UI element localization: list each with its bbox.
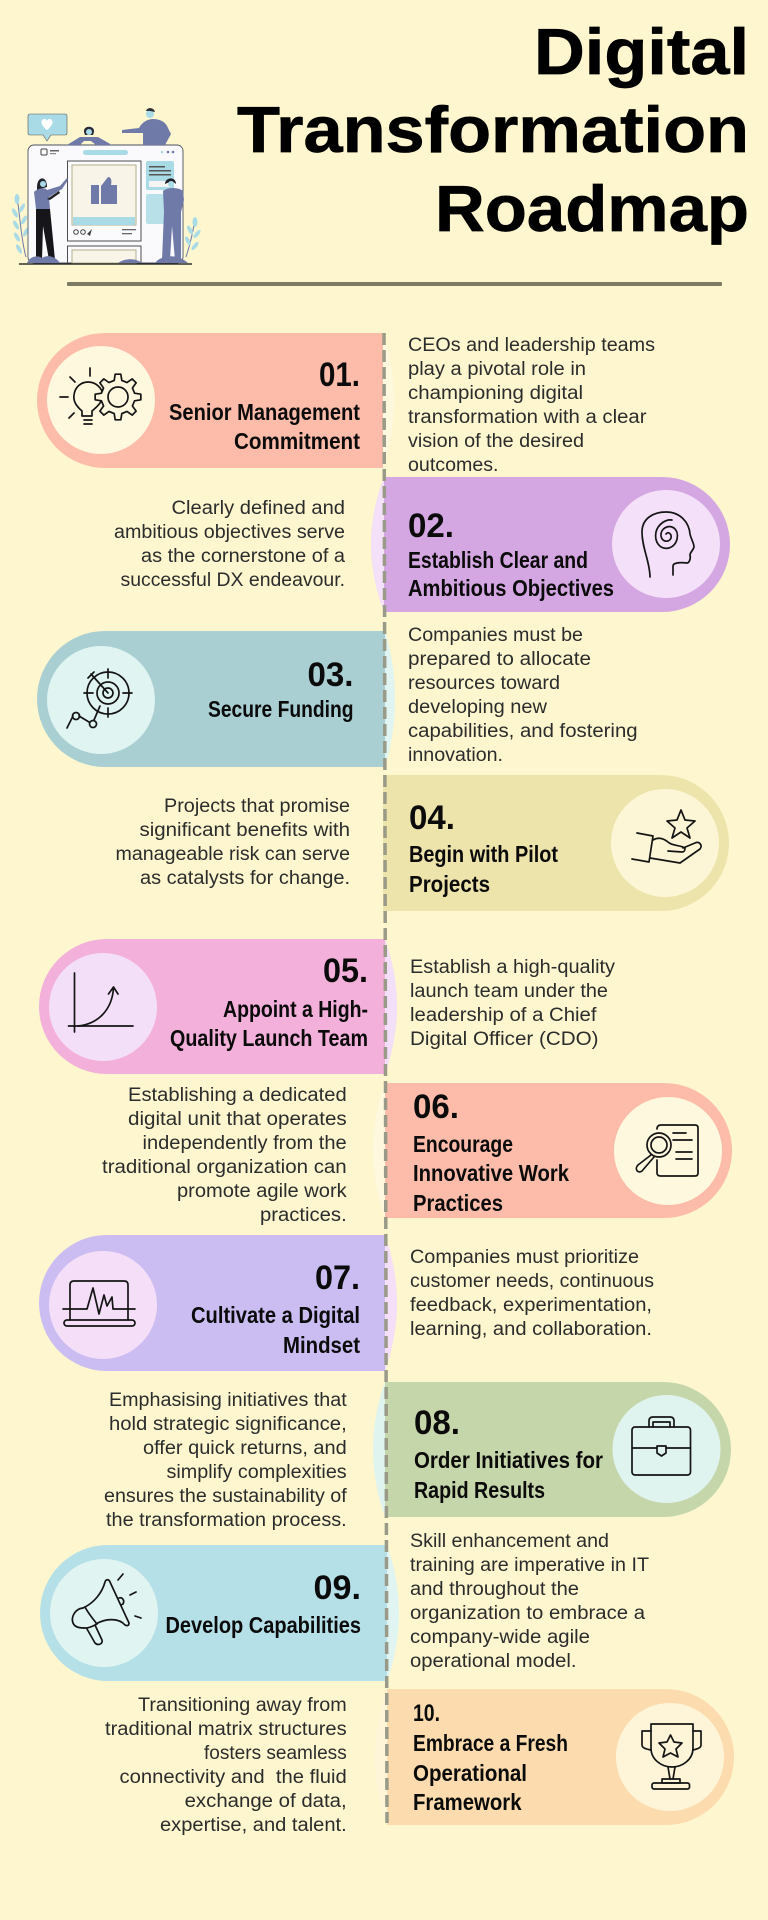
- icon: laptop with pulse: [63, 1281, 135, 1326]
- text block: step 09 description: [410, 1531, 649, 1672]
- panel: step 09: [40, 1545, 399, 1681]
- panel: step 08: [373, 1382, 731, 1517]
- heading: step 07: Cultivate a Digital: [191, 1302, 360, 1328]
- text block: step 01 description: transformation with a clear: [408, 407, 647, 428]
- text block: step 01 description: CEOs and leadership teams: [408, 335, 655, 356]
- text block: step 05 description: leadership of a Chief: [410, 1005, 597, 1026]
- heading: step 07: [191, 1302, 360, 1358]
- step number 03: 03.: [308, 656, 354, 694]
- heading: step 05: [170, 996, 368, 1051]
- text block: step 05 description: Establish a high-quality: [410, 957, 616, 978]
- text block: step 02 description: Clearly defined and: [172, 498, 345, 519]
- dashed center timeline: [384, 333, 387, 1823]
- step number 05: 05.: [323, 952, 368, 990]
- icon: trophy: [642, 1724, 701, 1789]
- text block: step 10 description: connectivity and the fluid: [120, 1767, 347, 1788]
- text block: step 05 description: [410, 957, 616, 1050]
- icon: light bulb and gear: [60, 368, 141, 424]
- text block: step 09 description: and throughout the: [410, 1579, 579, 1600]
- panel: step 04: [383, 775, 729, 911]
- step number 06: 06.: [413, 1088, 459, 1126]
- text block: step 09 description: company-wide agile: [410, 1627, 590, 1648]
- text block: step 05 description: Digital Officer (CDO): [410, 1029, 598, 1050]
- text block: step 07 description: learning, and collaboration.: [410, 1319, 652, 1340]
- text block: step 01 description: championing digital: [408, 383, 583, 404]
- icon: document with magnifier: [636, 1125, 698, 1176]
- illustration: team around social media screen: [11, 108, 202, 265]
- text block: step 05 description: launch team under the: [410, 981, 608, 1002]
- panel: step 06: [373, 1083, 732, 1218]
- text block: step 10 description: Transitioning away from: [138, 1695, 347, 1716]
- heading: step 10: Operational: [413, 1760, 527, 1786]
- title: [237, 15, 749, 245]
- text block: step 04 description: as catalysts for change.: [140, 868, 350, 889]
- panel: step 07: [39, 1235, 397, 1371]
- heading: step 01: [169, 399, 360, 454]
- title: Transformation: [237, 93, 749, 166]
- heading: step 01: Commitment: [234, 428, 360, 454]
- title: Digital: [534, 15, 749, 88]
- text block: step 06 description: Establishing a dedicated: [128, 1085, 347, 1106]
- text block: step 01 description: [408, 335, 655, 476]
- heading: step 10: Framework: [413, 1789, 522, 1815]
- panel: step 10: [375, 1689, 734, 1825]
- heading: step 02: Establish Clear and: [408, 547, 588, 573]
- text block: step 04 description: [116, 796, 350, 889]
- heading: step 06: Encourage: [413, 1131, 513, 1157]
- step number 08: 08.: [414, 1404, 460, 1442]
- icon: megaphone: [72, 1574, 141, 1644]
- heading: step 04: [409, 841, 558, 897]
- panel: step 03: [37, 631, 395, 767]
- text block: step 01 description: vision of the desired: [408, 431, 584, 452]
- text block: step 08 description: simplify complexities: [166, 1462, 347, 1483]
- text block: step 04 description: significant benefits with: [140, 820, 350, 841]
- text block: step 10 description: exchange of data,: [185, 1791, 347, 1812]
- heading: step 06: [413, 1131, 569, 1216]
- text block: step 10 description: traditional matrix structures: [105, 1719, 347, 1740]
- text block: step 06 description: digital unit that operates: [128, 1109, 347, 1130]
- text block: step 04 description: manageable risk can serve: [116, 844, 350, 865]
- heading: step 02: [408, 547, 614, 601]
- text block: step 03 description: Companies must be: [408, 625, 583, 646]
- text block: step 03 description: [408, 625, 638, 766]
- icon: briefcase: [632, 1417, 690, 1475]
- icon: target with arrow: [67, 669, 132, 728]
- heading: step 05: Appoint a High-: [223, 996, 368, 1022]
- text block: step 09 description: organization to embrace a: [410, 1603, 645, 1624]
- step number 10: 10.: [413, 1700, 440, 1727]
- text block: step 08 description: Emphasising initiatives that: [109, 1390, 347, 1411]
- heading: step 02: Ambitious Objectives: [408, 575, 614, 601]
- text block: step 02 description: as the cornerstone of a: [141, 546, 345, 567]
- text block: step 03 description: innovation.: [408, 745, 503, 766]
- icon: growth chart: [68, 973, 133, 1032]
- panel: step 05: [39, 939, 397, 1074]
- text block: step 07 description: customer needs, continuous: [410, 1271, 654, 1292]
- icon: head with spiral: [642, 512, 694, 577]
- heading: step 01: Senior Management: [169, 399, 360, 425]
- text block: step 01 description: outcomes.: [408, 455, 498, 476]
- text block: step 02 description: ambitious objectives serve: [114, 522, 345, 543]
- heading: step 09: Develop Capabilities: [166, 1612, 361, 1638]
- text block: step 07 description: [410, 1247, 654, 1340]
- step number 01: 01.: [319, 356, 360, 394]
- text block: step 03 description: resources toward: [408, 673, 560, 694]
- text block: step 06 description: independently from the: [142, 1133, 347, 1154]
- text block: step 04 description: Projects that promise: [164, 796, 350, 817]
- text block: step 09 description: Skill enhancement and: [410, 1531, 609, 1552]
- heading: step 08: Rapid Results: [414, 1477, 545, 1503]
- text block: step 08 description: offer quick returns, and: [143, 1438, 347, 1459]
- title: Roadmap: [435, 172, 749, 245]
- text block: step 03 description: prepared to allocate: [408, 649, 591, 670]
- heading: step 10: [413, 1730, 568, 1815]
- heading: step 05: Quality Launch Team: [170, 1025, 368, 1051]
- text block: step 08 description: ensures the sustainability of: [104, 1486, 347, 1507]
- text block: step 06 description: practices.: [260, 1205, 347, 1226]
- panel: step 01: [37, 333, 394, 468]
- text block: step 08 description: [104, 1390, 347, 1531]
- step number 02: 02.: [408, 507, 454, 545]
- text block: step 07 description: feedback, experimentation,: [410, 1295, 652, 1316]
- text block: step 07 description: Companies must prioritize: [410, 1247, 639, 1268]
- text block: step 02 description: [114, 498, 345, 591]
- heading: step 08: [414, 1447, 603, 1503]
- text block: step 10 description: expertise, and talent.: [160, 1815, 347, 1836]
- heading: step 04: Begin with Pilot: [409, 841, 558, 867]
- text block: step 06 description: [102, 1085, 347, 1226]
- text block: step 09 description: operational model.: [410, 1651, 576, 1672]
- text block: step 10 description: fosters seamless: [204, 1743, 347, 1764]
- heading: step 07: Mindset: [283, 1332, 360, 1358]
- step number 07: 07.: [315, 1259, 360, 1297]
- text block: step 01 description: play a pivotal role in: [408, 359, 586, 380]
- text block: step 08 description: hold strategic significance,: [109, 1414, 347, 1435]
- icon: hand holding star: [632, 810, 701, 863]
- panel: step 02: [371, 477, 730, 612]
- heading: step 03: Secure Funding: [208, 696, 354, 722]
- heading: step 06: Innovative Work: [413, 1160, 569, 1186]
- heading: step 04: Projects: [409, 871, 490, 897]
- text block: step 02 description: successful DX endeavour.: [120, 570, 345, 591]
- text block: step 08 description: the transformation process.: [106, 1510, 347, 1531]
- text block: step 06 description: traditional organization can: [102, 1157, 347, 1178]
- heading: step 10: Embrace a Fresh: [413, 1730, 568, 1756]
- heading: step 08: Order Initiatives for: [414, 1447, 603, 1473]
- text block: step 09 description: training are imperative in IT: [410, 1555, 649, 1576]
- text block: step 03 description: developing new: [408, 697, 547, 718]
- divider: [67, 282, 722, 286]
- text block: step 03 description: capabilities, and fostering: [408, 721, 638, 742]
- heading: step 06: Practices: [413, 1190, 503, 1216]
- text block: step 10 description: [105, 1695, 347, 1836]
- step number 04: 04.: [409, 799, 455, 837]
- text block: step 06 description: promote agile work: [177, 1181, 347, 1202]
- step number 09: 09.: [314, 1569, 361, 1607]
